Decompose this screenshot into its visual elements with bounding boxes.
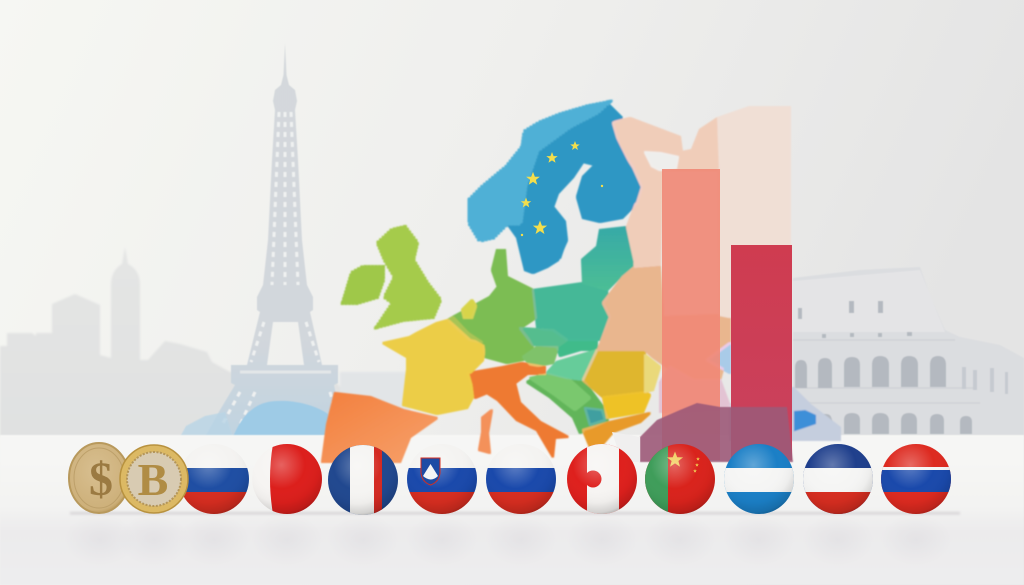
map: france (383, 320, 485, 414)
map: great britain (377, 227, 440, 327)
map: netherlands (462, 300, 476, 318)
floor (0, 435, 1024, 585)
map: czechia (520, 328, 567, 347)
map: italy (468, 363, 568, 457)
map: poland (533, 283, 610, 340)
bar: red (731, 245, 792, 460)
map: germany (453, 250, 537, 363)
flag ball 4: slovenia (407, 458, 477, 514)
base blue arc under tower (233, 401, 332, 437)
map: slovenia and croatia (530, 374, 590, 410)
flag ball 3: blue white red blue (328, 445, 398, 515)
map: bulgaria (603, 392, 650, 418)
map: adriatic coast detail (585, 408, 605, 425)
map: austria (523, 347, 558, 367)
flag ball 9: navy white red (803, 444, 873, 514)
map: periwinkle land (730, 388, 840, 440)
flag ball 6: red white with red disc (567, 444, 637, 514)
europe map (322, 103, 840, 462)
bar chart (662, 169, 792, 460)
eiffel tower (205, 43, 345, 437)
coat of arms (421, 458, 440, 485)
map: ukraine and belarus (598, 267, 730, 380)
map: norway (470, 103, 607, 240)
map: eu stars (521, 141, 603, 236)
map: spain (322, 393, 437, 462)
flag ball 7: green and china red (645, 444, 715, 514)
map: moldova (645, 355, 660, 392)
coin: dollar (69, 443, 129, 513)
flag ball 8: blue white blue (724, 444, 794, 514)
map: ireland (343, 267, 383, 303)
flag ball 5: white blue red (486, 462, 556, 514)
coin: bitcoin (120, 445, 188, 513)
map: north-west russia (610, 118, 720, 267)
map: white sea (645, 152, 678, 170)
map: gotland (557, 243, 565, 258)
coin: bitcoin: B (138, 454, 168, 505)
map: baltics (582, 227, 635, 290)
colosseum (793, 267, 1024, 437)
map: black sea region (660, 367, 730, 412)
map: scandinavia (470, 103, 642, 273)
map: slovakia (557, 340, 597, 356)
flag ball 10: red white blue red (881, 444, 951, 514)
coin: dollar: $ (89, 453, 113, 506)
map: greece (583, 413, 650, 447)
map: sardinia and corsica (479, 410, 492, 453)
faint background bar (718, 107, 790, 320)
pale blue base left (180, 412, 233, 437)
map: hungary (547, 350, 597, 380)
floor contact shadow (70, 512, 960, 514)
map: light blue sea (707, 343, 730, 373)
flag ball 2: white red (252, 444, 322, 514)
map: romania (583, 350, 645, 397)
ball reflections (64, 514, 952, 566)
skyline silhouette (0, 247, 410, 437)
map: blue patch (793, 409, 817, 433)
greek islands (612, 432, 640, 462)
map: turkey (640, 403, 793, 462)
bar: salmon (662, 169, 720, 460)
map: balkans (527, 375, 608, 433)
flag ball 1: white blue red (184, 462, 249, 514)
map: benelux (448, 317, 483, 343)
